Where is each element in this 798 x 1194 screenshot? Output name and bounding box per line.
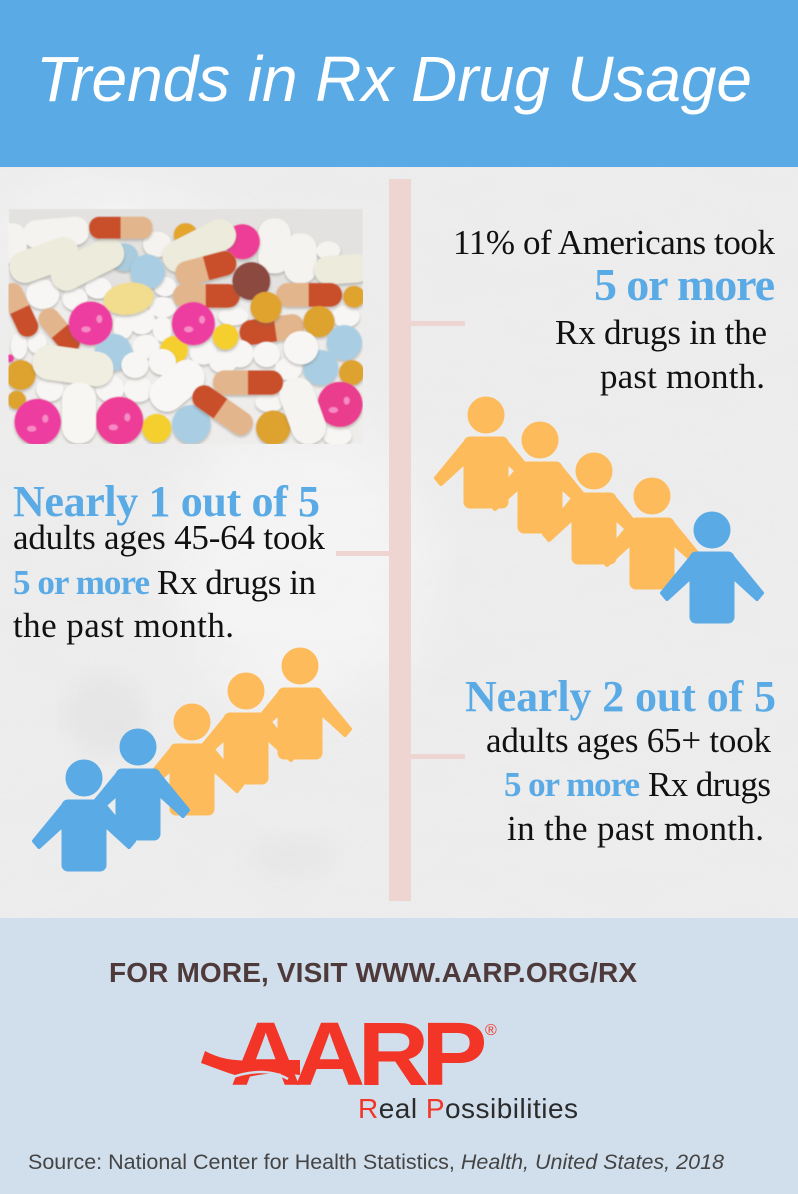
stat: 11% of Americans: Rx drugs in the: [555, 313, 767, 352]
call to action: FOR MORE, VISIT WWW.AARP.ORG/RX: [109, 957, 637, 988]
stat: nearly 2 out of 5: 5 or more: [504, 765, 640, 804]
stat: nearly 1 out of 5: [13, 477, 326, 645]
stat: 11% of Americans: past month.: [600, 357, 765, 396]
stat: nearly 2 out of 5: in the past month.: [507, 809, 764, 848]
middle white tablets: [36, 335, 352, 446]
photo of assorted pills: [0, 209, 372, 449]
flat tablets: [6, 254, 365, 445]
stat: nearly 2 out of 5: Rx drugs: [648, 765, 771, 804]
source: Source: National Center for Health Statistics, Health, United States, 2018: [28, 1150, 724, 1174]
title: Trends in Rx Drug Usage: [36, 43, 752, 115]
small white tablets: [11, 277, 360, 359]
timeline vertical bar and connectors: [336, 179, 465, 901]
stat: 11% of Americans: [453, 223, 776, 396]
stat: nearly 1 out of 5: 5 or more: [13, 563, 150, 602]
stat: nearly 2 out of 5: Nearly 2 out of 5: [465, 672, 776, 721]
footer panel: [0, 918, 798, 1194]
title banner: [0, 0, 798, 167]
stat: 11% of Americans: 5 or more: [594, 259, 775, 310]
front white tablets and capsules: [30, 331, 331, 449]
tagline: Real Possibilities: [358, 1093, 578, 1124]
stat: nearly 2 out of 5: [465, 672, 776, 848]
stat: 11% of Americans: 11% of Americans took: [453, 223, 776, 262]
stat: nearly 2 out of 5: adults ages 65+ took: [486, 721, 772, 760]
textured background: [0, 167, 798, 918]
icon: five people, two highlighted: [34, 648, 350, 871]
back white capsules: [0, 215, 340, 283]
stat: nearly 1 out of 5: the past month.: [13, 606, 234, 645]
AARP logo: ®: [485, 1022, 497, 1039]
stat: nearly 1 out of 5: adults ages 45-64 took: [13, 518, 326, 557]
icon: five people, one highlighted: [436, 397, 762, 623]
AARP logo: AARP: [230, 1004, 484, 1105]
stat: nearly 1 out of 5: Nearly 1 out of 5: [13, 477, 320, 526]
cream capsules: [8, 220, 363, 294]
two-tone capsules: [0, 217, 342, 357]
stat: nearly 1 out of 5: Rx drugs in: [157, 563, 316, 602]
pink tablet highlights: [27, 315, 350, 432]
